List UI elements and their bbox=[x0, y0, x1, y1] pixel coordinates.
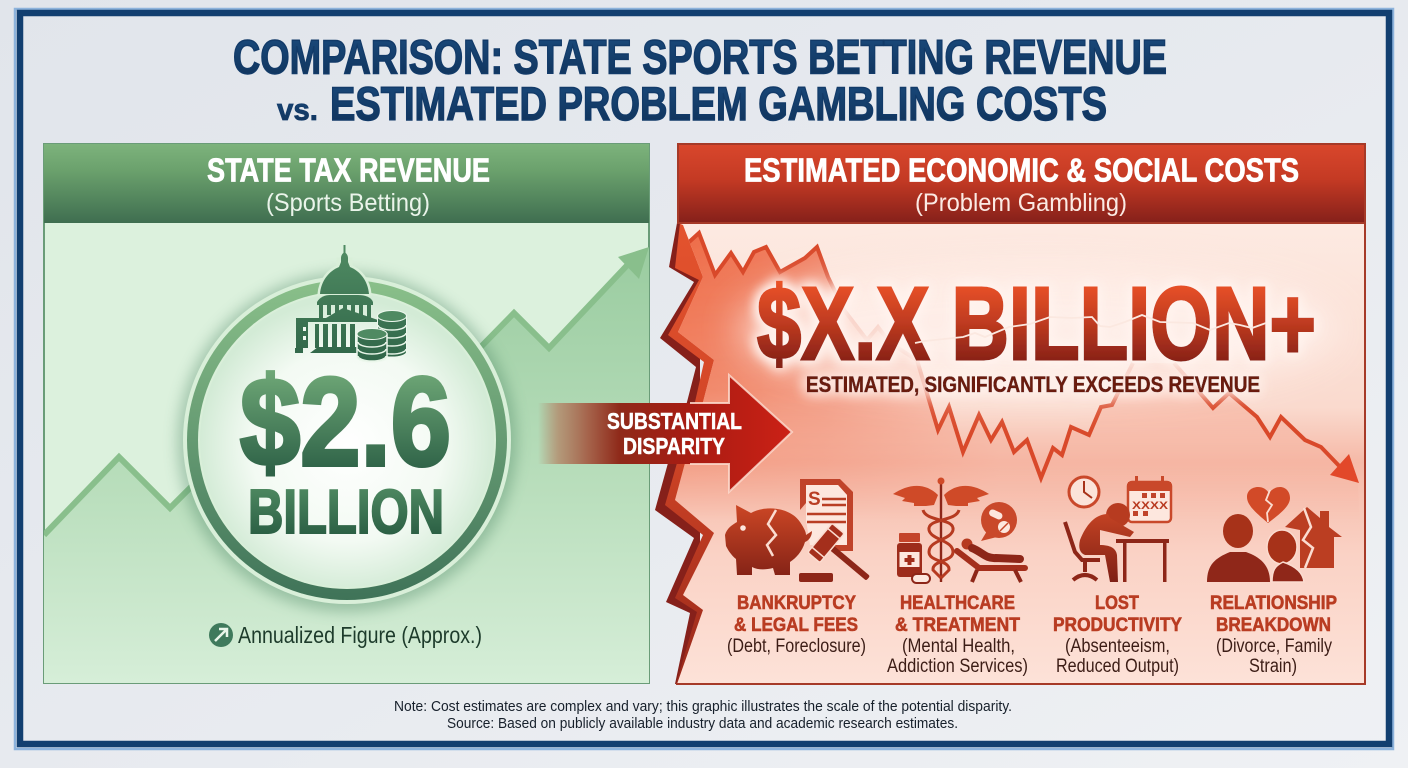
icon: broken piggy bank, bill and gavel: S bbox=[808, 489, 821, 510]
right panel header bbox=[678, 144, 1365, 223]
subheading: ESTIMATED, SIGNIFICANTLY EXCEEDS REVENUE bbox=[806, 372, 1260, 397]
rising revenue chart bbox=[44, 247, 649, 683]
label: Strain) bbox=[1249, 656, 1297, 677]
label: Reduced Output) bbox=[1056, 656, 1179, 677]
left panel header: (Sports Betting) bbox=[266, 189, 430, 217]
label: & LEGAL FEES bbox=[734, 614, 858, 636]
label bbox=[1210, 592, 1337, 677]
footnote bbox=[394, 699, 1012, 732]
icon: slumped worker, clock and calendar bbox=[1065, 476, 1171, 582]
arrow: substantial disparity: DISPARITY bbox=[623, 433, 725, 459]
right panel header: (Problem Gambling) bbox=[915, 189, 1127, 217]
title bbox=[233, 32, 1167, 130]
cost: healthcare and treatment bbox=[887, 478, 1028, 677]
icon: broken piggy bank, bill and gavel bbox=[725, 479, 880, 593]
title: vs. bbox=[277, 92, 318, 127]
panel: state tax revenue bbox=[44, 144, 649, 683]
right panel border bbox=[676, 223, 1365, 684]
icon: capitol building with coins bbox=[295, 245, 406, 362]
label: (Debt, Foreclosure) bbox=[727, 636, 866, 657]
label: BANKRUPTCY bbox=[737, 592, 856, 614]
label: RELATIONSHIP bbox=[1210, 592, 1337, 614]
label: & TREATMENT bbox=[895, 614, 1020, 636]
revenue medallion bbox=[177, 245, 517, 612]
value: $2.6 billion: $2.6 bbox=[240, 353, 451, 492]
jagged torn edge bbox=[655, 223, 720, 684]
label bbox=[727, 592, 866, 657]
falling cost chart bbox=[675, 230, 1359, 508]
label bbox=[1053, 592, 1182, 677]
cost: relationship breakdown bbox=[1207, 487, 1342, 677]
footnote: Source: Based on publicly available industry data and academic research estimates. bbox=[447, 716, 958, 732]
arrow: substantial disparity: SUBSTANTIAL bbox=[607, 408, 742, 434]
cost: lost productivity bbox=[1053, 476, 1182, 677]
label: (Divorce, Family bbox=[1216, 636, 1332, 657]
arrow: substantial disparity bbox=[538, 375, 792, 492]
label: LOST bbox=[1095, 592, 1139, 614]
icon: broken heart, couple and split house bbox=[1207, 487, 1342, 582]
label: (Mental Health, bbox=[902, 636, 1015, 657]
icon: slumped worker, clock and calendar: XXXX bbox=[1132, 500, 1169, 512]
title: COMPARISON: STATE SPORTS BETTING REVENUE bbox=[233, 32, 1167, 84]
label: PRODUCTIVITY bbox=[1053, 614, 1182, 636]
label bbox=[887, 592, 1028, 677]
cost: bankruptcy and legal fees bbox=[725, 479, 880, 657]
icon: caduceus, medicine and patient bbox=[893, 478, 1025, 583]
left panel body bbox=[44, 144, 649, 683]
panel: economic and social costs bbox=[655, 144, 1365, 684]
title: ESTIMATED PROBLEM GAMBLING COSTS bbox=[330, 77, 1107, 130]
label: BREAKDOWN bbox=[1216, 614, 1331, 636]
label: (Absenteeism, bbox=[1065, 636, 1170, 657]
right panel header: ESTIMATED ECONOMIC & SOCIAL COSTS bbox=[744, 152, 1299, 188]
right panel body bbox=[675, 223, 1365, 684]
value: $2.6 billion bbox=[240, 353, 451, 547]
label: HEALTHCARE bbox=[900, 592, 1015, 614]
label: Addiction Services) bbox=[887, 656, 1028, 677]
left panel header bbox=[44, 144, 649, 223]
value: $2.6 billion: BILLION bbox=[248, 478, 444, 547]
annualized figure note: Annualized Figure (Approx.) bbox=[238, 622, 482, 648]
left panel header: STATE TAX REVENUE bbox=[207, 152, 490, 188]
footnote: Note: Cost estimates are complex and vary; this graphic illustrates the scale of the potential disparity. bbox=[394, 699, 1012, 715]
